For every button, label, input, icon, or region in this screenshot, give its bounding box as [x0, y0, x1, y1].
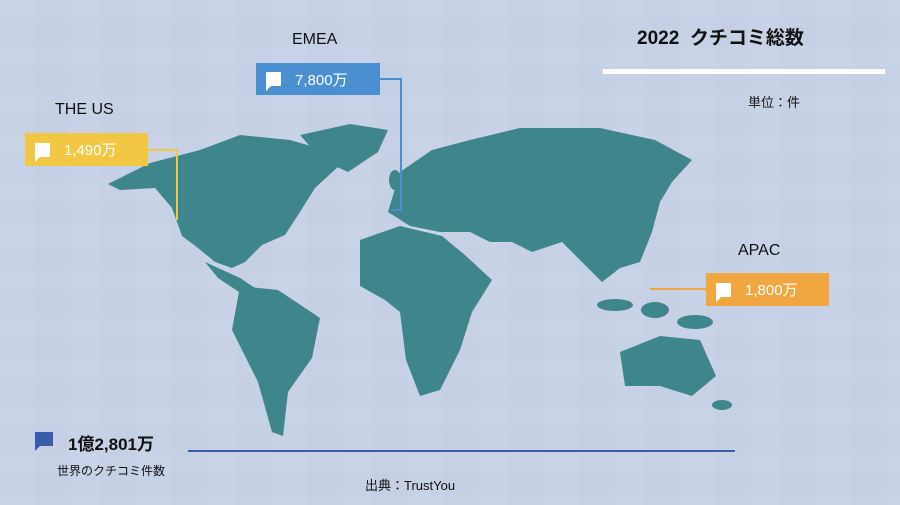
title: 2022 クチコミ総数 — [637, 28, 804, 49]
unit: 単位：件 — [748, 95, 800, 110]
box: US — [25, 133, 148, 166]
box: EMEA — [256, 63, 380, 95]
box: APAC — [706, 273, 829, 306]
label: APAC: APAC — [738, 242, 780, 259]
icon: total bubble — [35, 432, 53, 446]
box: APAC: 1,800万 — [745, 282, 798, 299]
connector lines — [148, 79, 735, 451]
total: 世界のクチコミ件数 — [57, 464, 165, 478]
label: THE US: THE US — [55, 101, 114, 118]
total — [35, 432, 165, 478]
box: EMEA: 7,800万 — [295, 72, 348, 88]
total: 1億2,801万 — [68, 435, 154, 454]
label: EMEA: EMEA — [292, 31, 337, 48]
source: 出典：TrustYou — [365, 478, 455, 493]
box: US: 1,490万 — [64, 142, 117, 159]
